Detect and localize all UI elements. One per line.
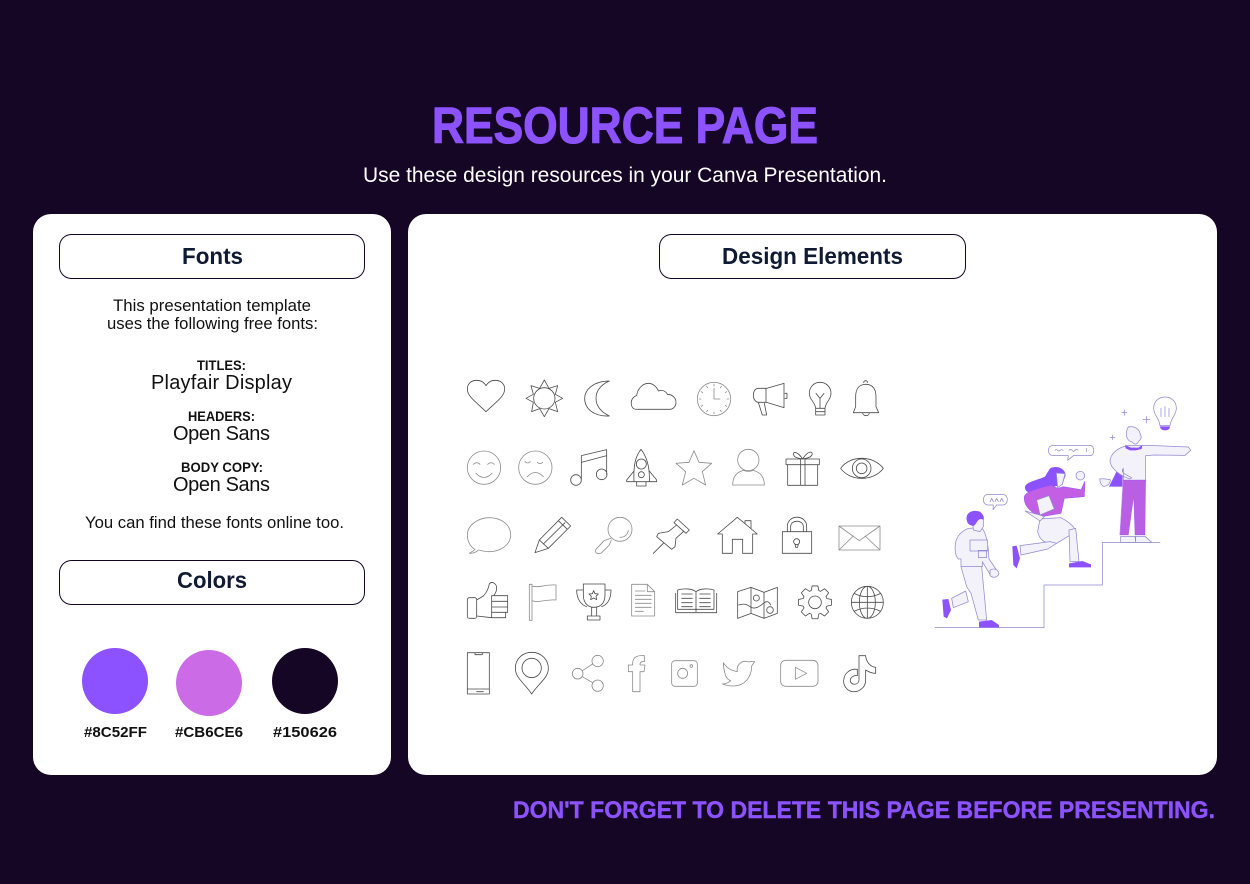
text block: font list: TITLES: bbox=[197, 357, 246, 373]
panel: design elements bbox=[408, 214, 1217, 775]
icon: smile bbox=[467, 451, 501, 484]
text block: font note: You can find these fonts online too. bbox=[85, 514, 344, 532]
icon: house bbox=[718, 517, 757, 553]
illustration: people climbing stairs bbox=[935, 397, 1191, 628]
icon rows 1 and 2 bbox=[467, 380, 883, 486]
icon: padlock bbox=[782, 517, 812, 553]
color swatch: purple bbox=[82, 648, 148, 741]
icon: push pin bbox=[653, 519, 689, 553]
icon: map bbox=[738, 587, 777, 618]
icon: open book bbox=[676, 589, 717, 613]
speech bubble: woman bbox=[1048, 445, 1094, 460]
text block: font list: HEADERS: bbox=[188, 408, 255, 424]
icon: document bbox=[632, 584, 655, 616]
icon: sun bbox=[526, 380, 563, 417]
icon: map pin bbox=[515, 652, 548, 694]
text block: font list: Open Sans bbox=[173, 474, 270, 496]
text block: font list bbox=[151, 357, 292, 496]
icon: facebook bbox=[628, 656, 645, 692]
icon: magnifier bbox=[595, 517, 632, 554]
heading: design elements bbox=[660, 234, 966, 278]
icon: music note bbox=[571, 450, 607, 485]
icon: speech bubble bbox=[467, 518, 511, 553]
icon: trophy bbox=[577, 584, 611, 620]
icon: idea bulb bbox=[1110, 397, 1176, 440]
color swatch: dark bbox=[272, 648, 338, 741]
icon: instagram bbox=[672, 661, 697, 686]
icon: bell bbox=[853, 381, 879, 416]
footer reminder: DON'T FORGET TO DELETE THIS PAGE BEFORE PRESENTING. bbox=[513, 797, 1215, 824]
heading: colors: Colors bbox=[177, 567, 247, 593]
icon: envelope bbox=[839, 526, 880, 550]
heading: fonts: Fonts bbox=[182, 243, 243, 269]
heading: design elements: Design Elements bbox=[722, 243, 903, 269]
color swatch: pink: #CB6CE6 bbox=[175, 724, 243, 741]
text block: font intro: uses the following free fonts: bbox=[107, 315, 318, 333]
speech bubble: man with book bbox=[983, 494, 1007, 510]
icon: gift bbox=[786, 452, 819, 485]
figure: woman running bbox=[1012, 467, 1091, 568]
color swatch: dark: #150626 bbox=[273, 724, 337, 741]
title: RESOURCE PAGE bbox=[432, 97, 818, 154]
icon: thumbs up bbox=[467, 583, 508, 618]
icon: moon bbox=[585, 381, 609, 416]
icon: heart bbox=[467, 380, 505, 412]
icon: sad face bbox=[519, 451, 552, 484]
figure: man with book bbox=[942, 511, 999, 627]
icon: cloud bbox=[631, 383, 676, 409]
icon: tiktok bbox=[844, 656, 876, 692]
heading: colors bbox=[60, 560, 364, 604]
text block: font list: Playfair Display bbox=[151, 372, 292, 394]
icon: user bbox=[733, 449, 764, 485]
icon: eye bbox=[841, 458, 883, 478]
icon: light bulb bbox=[809, 382, 831, 415]
icon: globe bbox=[851, 586, 883, 618]
icon: youtube bbox=[781, 660, 818, 686]
text block: font intro: This presentation template bbox=[113, 297, 311, 315]
text block: font list: Open Sans bbox=[173, 423, 270, 445]
icon: share bbox=[572, 655, 603, 691]
icon: rocket bbox=[627, 449, 657, 486]
icon: gear bbox=[799, 586, 831, 619]
text block: font intro bbox=[107, 297, 318, 333]
stairs bbox=[935, 542, 1160, 628]
icon: pencil bbox=[535, 517, 571, 553]
icon rows 3 to 5 bbox=[467, 517, 883, 694]
icon: phone bbox=[467, 653, 489, 694]
icon: clock bbox=[697, 382, 731, 416]
icon: flag bbox=[529, 584, 556, 620]
panel: fonts and colors bbox=[33, 214, 391, 775]
color swatch: purple: #8C52FF bbox=[84, 724, 147, 741]
subtitle: Use these design resources in your Canva Presentation. bbox=[363, 164, 887, 187]
heading: fonts bbox=[60, 234, 364, 278]
color swatch: pink bbox=[175, 650, 243, 741]
icon: star bbox=[676, 451, 712, 485]
icon: twitter bbox=[722, 661, 755, 686]
icon: megaphone bbox=[753, 383, 787, 415]
figure: man pointing bbox=[1100, 427, 1191, 542]
text block: font list: BODY COPY: bbox=[181, 459, 263, 475]
